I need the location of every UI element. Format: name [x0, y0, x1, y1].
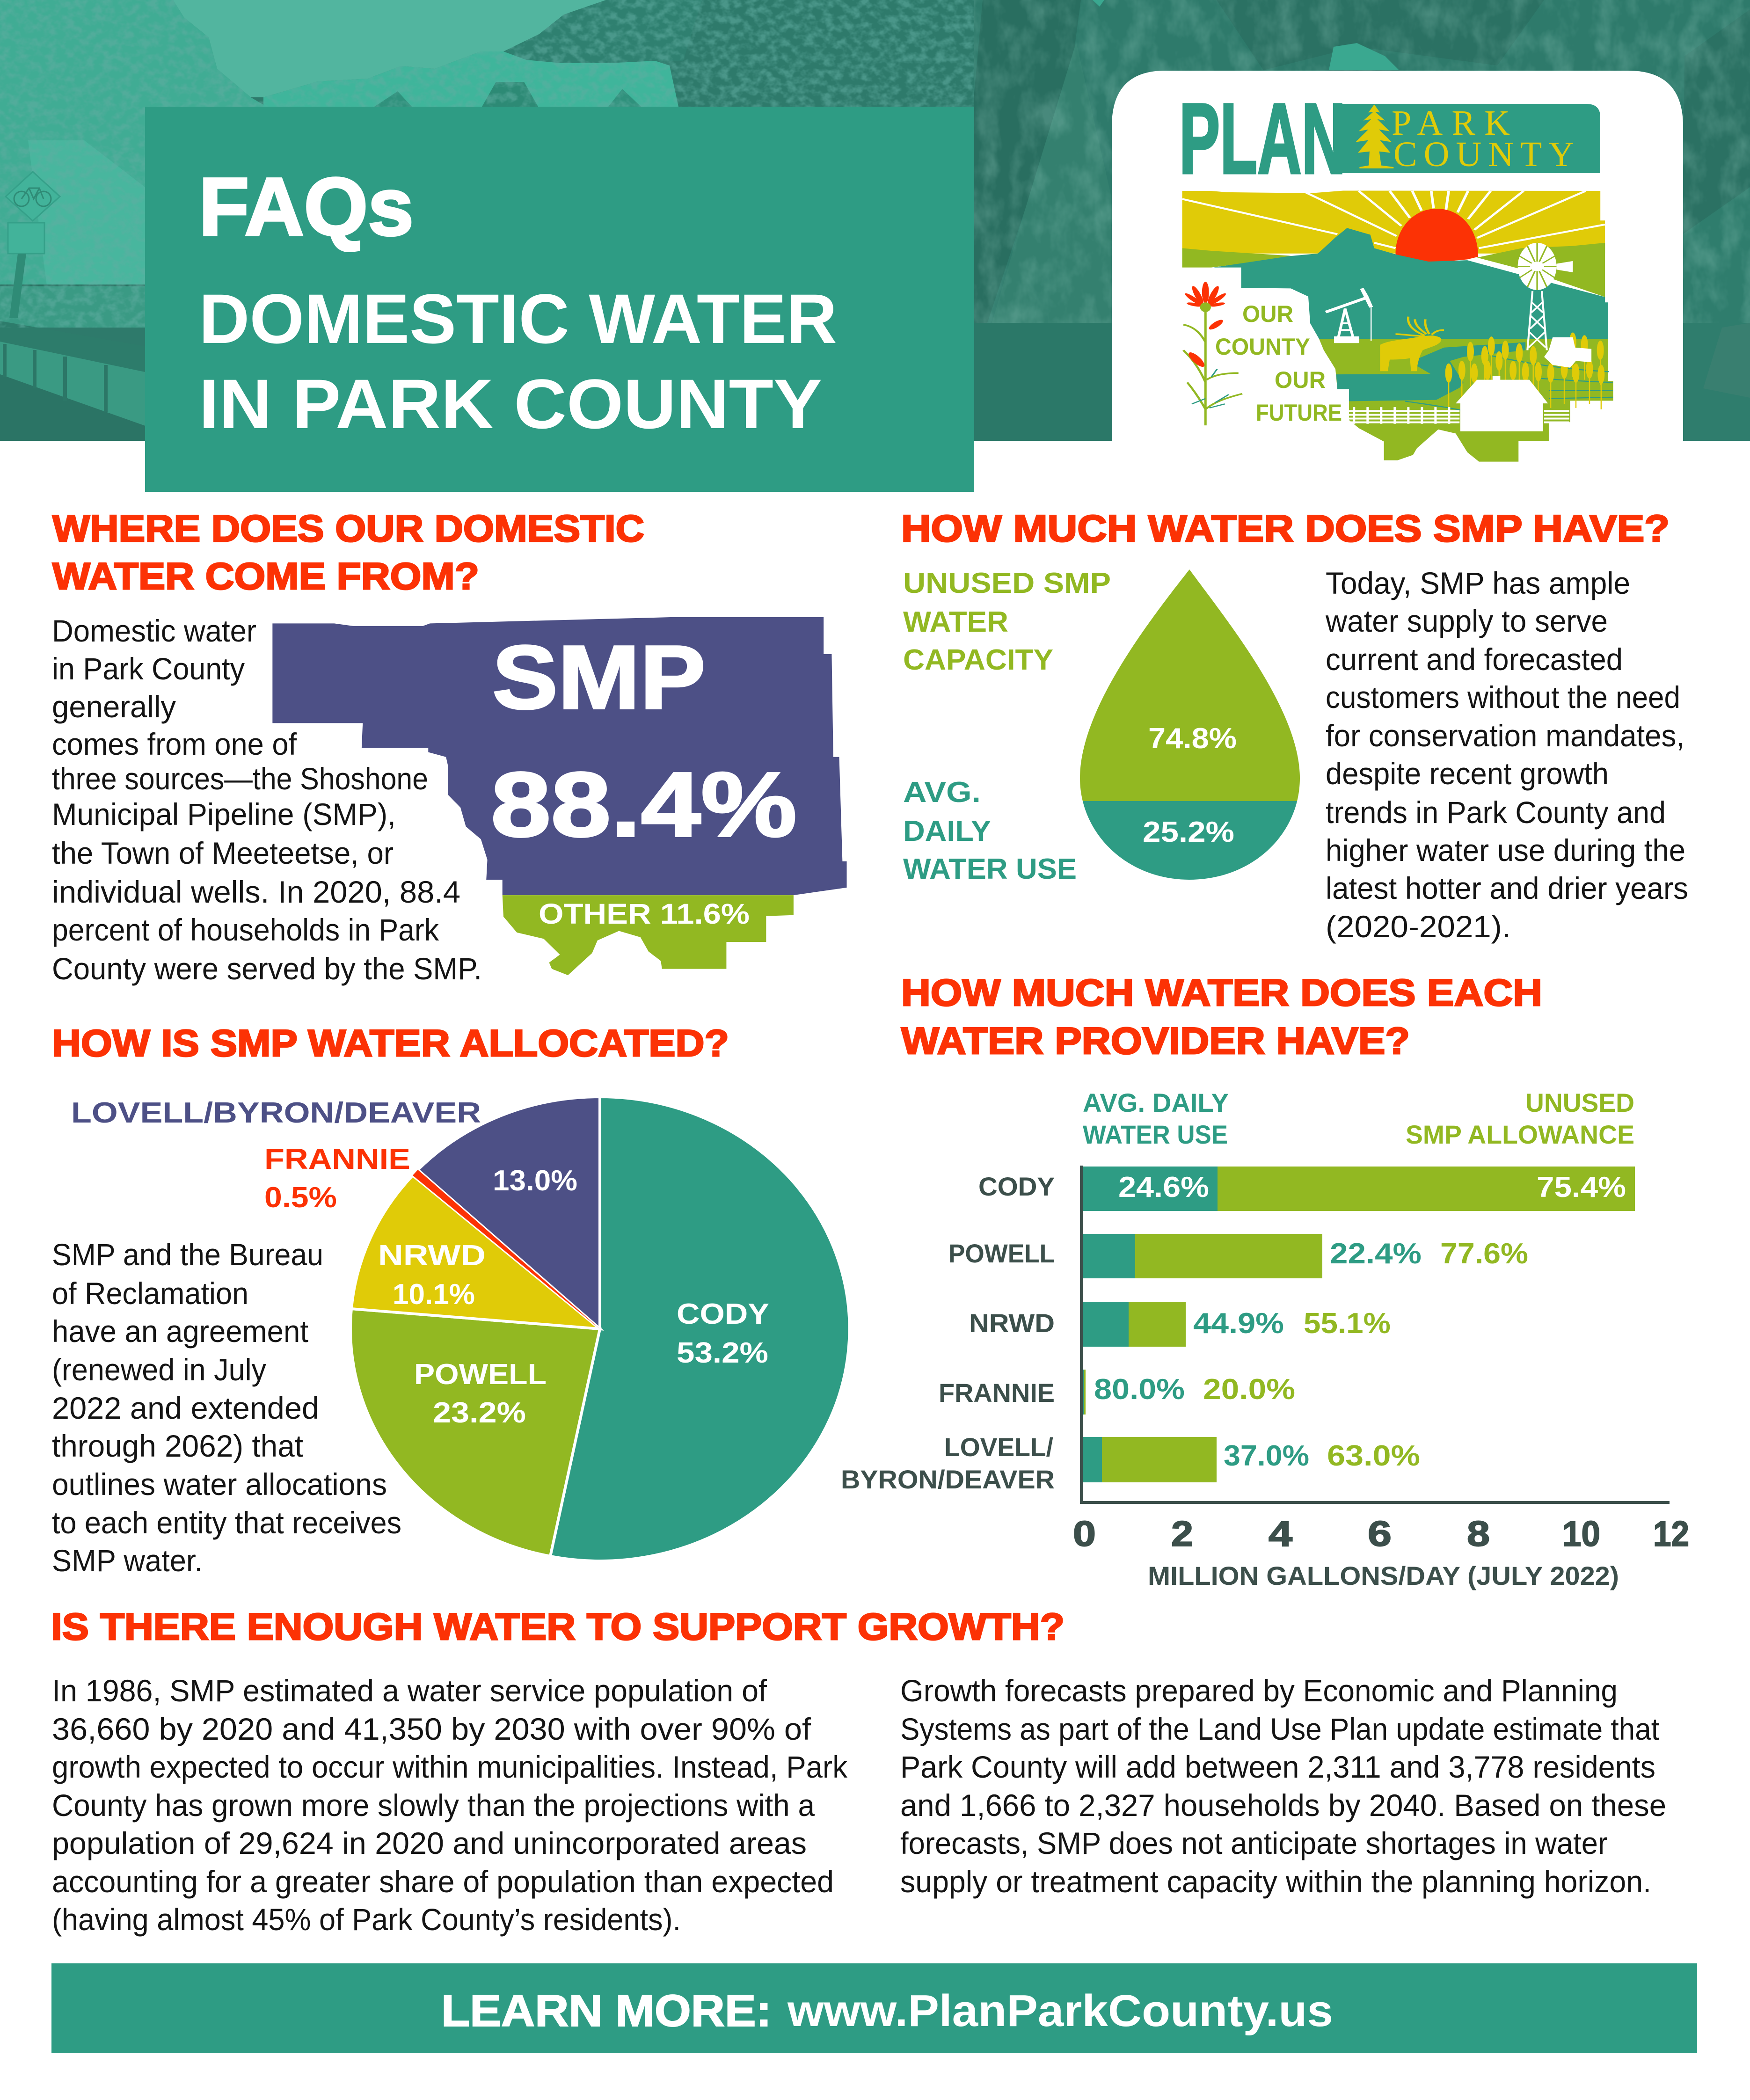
road signs	[6, 172, 60, 318]
category labels: NRWD	[969, 1308, 1055, 1338]
text block: the Town of Meeteetse, or	[52, 836, 394, 870]
bars	[1083, 1167, 1635, 1482]
river	[1336, 342, 1525, 401]
text block: despite recent growth	[1326, 756, 1609, 791]
county map chart: OTHER 11.6%	[539, 898, 750, 930]
logo tagline: COUNTY	[1215, 334, 1310, 360]
pie outside labels: FRANNIE	[264, 1143, 410, 1175]
text block: left column: accounting for a greater share of population than expected	[52, 1864, 834, 1899]
value labels: 22.4%	[1330, 1238, 1422, 1270]
axis numbers: 8	[1467, 1514, 1490, 1554]
pie chart	[350, 1097, 849, 1561]
text block: right column: forecasts, SMP does not anticipate shortages in water	[900, 1826, 1608, 1860]
heading: WATER COME FROM?	[52, 555, 479, 598]
county map chart	[272, 617, 847, 975]
value labels: 37.0%	[1224, 1440, 1309, 1472]
axis numbers: 0	[1073, 1514, 1096, 1554]
water drop chart	[1080, 569, 1300, 880]
map: other share	[503, 895, 794, 975]
section: how is SMP water allocated	[52, 1022, 849, 1578]
slice: Frannie	[413, 1170, 600, 1329]
value labels: 80.0%	[1094, 1373, 1185, 1406]
icon: windmill	[1518, 243, 1573, 350]
text block: current and forecasted	[1326, 642, 1623, 677]
text block: percent of households in Park	[52, 912, 439, 947]
icon: barn	[1456, 376, 1548, 431]
pie chart: 13.0%	[493, 1165, 577, 1197]
map: SMP share	[272, 617, 847, 895]
heading: HOW MUCH WATER DOES SMP HAVE?	[901, 508, 1670, 550]
legend: SMP ALLOWANCE	[1406, 1120, 1634, 1149]
county map chart: SMP	[492, 627, 706, 728]
title: FAQs: FAQs	[199, 161, 414, 253]
icon: mountain	[1213, 228, 1608, 339]
icon: pine tree	[1356, 104, 1393, 168]
learn more banner	[51, 1963, 1697, 2053]
text block: three sources—the Shoshone	[52, 761, 428, 796]
heading: WHERE DOES OUR DOMESTIC	[52, 508, 644, 550]
text block: right column: Growth forecasts prepared by Economic and Planning	[900, 1673, 1618, 1708]
icon: sun	[1395, 209, 1478, 262]
category labels: LOVELL/	[944, 1432, 1053, 1462]
hero photo: mountain canyon in teal duotone	[0, 0, 1750, 441]
text block: customers without the need	[1326, 680, 1680, 715]
value labels	[1094, 1171, 1626, 1472]
icon: oil pump	[1326, 288, 1371, 342]
text block: Municipal Pipeline (SMP),	[52, 797, 396, 831]
drop labels: AVG.	[903, 776, 981, 809]
text block: left column	[52, 1673, 848, 1937]
value labels: 63.0%	[1327, 1440, 1420, 1472]
text block: water supply to serve	[1325, 604, 1608, 638]
text block: for conservation mandates,	[1326, 718, 1684, 753]
text block: right column: supply or treatment capacity within the planning horizon.	[900, 1864, 1651, 1899]
icon: wheat	[1445, 333, 1604, 409]
text block: Domestic water	[52, 613, 256, 648]
heading: HOW IS SMP WATER ALLOCATED?	[52, 1022, 729, 1065]
text block: trends in Park County and	[1326, 795, 1666, 830]
text block: to each entity that receives	[52, 1505, 401, 1540]
value labels: 55.1%	[1304, 1307, 1391, 1340]
text block: Today, SMP has ample	[1326, 566, 1630, 600]
logo tagline: FUTURE	[1256, 400, 1342, 426]
logo wordmark: Plan Park County: PLAN	[1179, 83, 1346, 195]
text block: (2020-2021).	[1326, 909, 1511, 944]
value labels: 20.0%	[1203, 1373, 1295, 1406]
logo tagline: OUR	[1242, 301, 1293, 327]
axis numbers: 10	[1562, 1514, 1600, 1554]
title: domestic water: DOMESTIC WATER	[199, 279, 837, 358]
legend: UNUSED	[1525, 1088, 1634, 1117]
drop labels: UNUSED SMP	[903, 567, 1111, 599]
pie outside labels	[71, 1097, 481, 1214]
text block: left column: (having almost 45% of Park County’s residents).	[52, 1902, 681, 1937]
category labels: POWELL	[948, 1239, 1055, 1268]
text block: outlines water allocations	[52, 1467, 387, 1502]
slice: Cody	[550, 1097, 849, 1561]
water drop chart: 74.8%	[1148, 722, 1237, 755]
text block: left column: 36,660 by 2020 and 41,350 by 2030 with over 90% of	[52, 1712, 811, 1746]
text block: County were served by the SMP.	[52, 951, 482, 986]
category labels: BYRON/DEAVER	[841, 1465, 1055, 1494]
section: is there enough water to support growth	[51, 1606, 1666, 1937]
text block: generally	[52, 689, 176, 724]
axis numbers: 12	[1653, 1514, 1689, 1554]
pie chart: POWELL	[414, 1358, 547, 1391]
drop labels: WATER	[903, 606, 1008, 638]
field	[1319, 339, 1613, 462]
logo card	[1112, 71, 1683, 468]
text block: have an agreement	[52, 1314, 308, 1349]
pie outside labels: 0.5%	[264, 1181, 337, 1214]
learn more banner: www.PlanParkCounty.us	[787, 1986, 1333, 2036]
axis numbers: 2	[1171, 1514, 1193, 1554]
axes	[1080, 1166, 1670, 1504]
bar chart	[841, 1088, 1689, 1590]
logo wordmark: Plan Park County	[1179, 83, 1600, 195]
text block: right column: Park County will add between 2,311 and 3,778 residents	[900, 1750, 1655, 1784]
text block: SMP water.	[52, 1543, 203, 1578]
axis numbers: 6	[1368, 1514, 1392, 1554]
text block	[52, 1237, 401, 1578]
text block: (renewed in July	[52, 1352, 266, 1387]
slice: Powell	[350, 1309, 600, 1556]
drop labels	[903, 567, 1111, 885]
drop labels: CAPACITY	[903, 644, 1053, 676]
drop labels: WATER USE	[903, 853, 1077, 885]
text block: higher water use during the	[1326, 833, 1685, 868]
pie chart: 10.1%	[393, 1278, 475, 1311]
text block: left column: growth expected to occur within municipalities. Instead, Park	[52, 1750, 848, 1784]
category labels: CODY	[978, 1172, 1055, 1201]
text block: through 2062) that	[52, 1429, 303, 1463]
value labels: 44.9%	[1193, 1307, 1284, 1340]
legend: WATER USE	[1083, 1120, 1228, 1149]
heading	[901, 972, 1542, 1062]
text block: comes from one of	[52, 727, 297, 761]
text block: of Reclamation	[52, 1276, 248, 1311]
section: how much water does each water provider have	[841, 972, 1689, 1590]
text block	[52, 613, 482, 986]
pie chart: 53.2%	[677, 1337, 768, 1369]
icon: tractor	[1544, 337, 1591, 368]
county map chart: 88.4%	[491, 753, 797, 856]
text block: right column: Systems as part of the Land Use Plan update estimate that	[900, 1712, 1659, 1746]
text block: right column	[900, 1673, 1666, 1899]
legend: AVG. DAILY	[1083, 1088, 1229, 1117]
text block: left column: In 1986, SMP estimated a water service population of	[52, 1673, 767, 1708]
pie chart: CODY	[677, 1298, 769, 1330]
text block: 2022 and extended	[52, 1391, 319, 1425]
category labels	[841, 1172, 1055, 1494]
value labels: 75.4%	[1537, 1171, 1626, 1203]
text block: left column: population of 29,624 in 2020 and unincorporated areas	[52, 1826, 807, 1860]
slice: NRWD	[351, 1175, 600, 1329]
slice: Lovell/Byron/Deaver	[418, 1097, 600, 1329]
logo wordmark: Plan Park County: COUNTY	[1393, 135, 1574, 174]
title panel	[145, 107, 974, 492]
text block: SMP and the Bureau	[52, 1237, 323, 1272]
axis numbers: 4	[1269, 1514, 1292, 1554]
pie chart: 23.2%	[433, 1397, 526, 1429]
pie chart: NRWD	[378, 1240, 486, 1272]
axis numbers	[1073, 1514, 1689, 1554]
logo wordmark: Plan Park County: PARK	[1392, 103, 1510, 143]
icon: paintbrush flower	[1183, 282, 1242, 425]
drop labels: DAILY	[903, 815, 991, 847]
category labels: FRANNIE	[939, 1378, 1055, 1407]
fence	[1349, 407, 1569, 424]
section: how much water does SMP have	[901, 508, 1688, 944]
text block: left column: County has grown more slowly than the projections with a	[52, 1788, 815, 1823]
text block: individual wells. In 2020, 88.4	[52, 875, 460, 909]
heading	[52, 508, 644, 598]
axis title: MILLION GALLONS/DAY (JULY 2022)	[1148, 1561, 1619, 1590]
section: where does our domestic water come from	[52, 508, 847, 986]
heading: WATER PROVIDER HAVE?	[901, 1020, 1410, 1062]
value labels: 24.6%	[1118, 1171, 1209, 1203]
icon: elk	[1380, 317, 1444, 371]
legend	[1083, 1088, 1634, 1149]
title: in park county: IN PARK COUNTY	[199, 365, 822, 443]
heading: HOW MUCH WATER DOES EACH	[901, 972, 1542, 1014]
learn more banner: LEARN MORE:	[441, 1986, 772, 2036]
logo tagline: OUR	[1275, 367, 1326, 393]
logo tagline	[1215, 301, 1342, 426]
value labels: 77.6%	[1440, 1238, 1528, 1270]
logo illustration: county landscape	[1182, 190, 1613, 462]
text block: right column: and 1,666 to 2,327 households by 2040. Based on these	[900, 1788, 1666, 1823]
water drop chart: 25.2%	[1143, 816, 1234, 848]
text block	[1325, 566, 1688, 944]
pie outside labels: LOVELL/BYRON/DEAVER	[71, 1097, 481, 1129]
text block: in Park County	[52, 651, 245, 686]
text block: latest hotter and drier years	[1326, 871, 1688, 905]
heading: IS THERE ENOUGH WATER TO SUPPORT GROWTH?	[51, 1606, 1065, 1648]
